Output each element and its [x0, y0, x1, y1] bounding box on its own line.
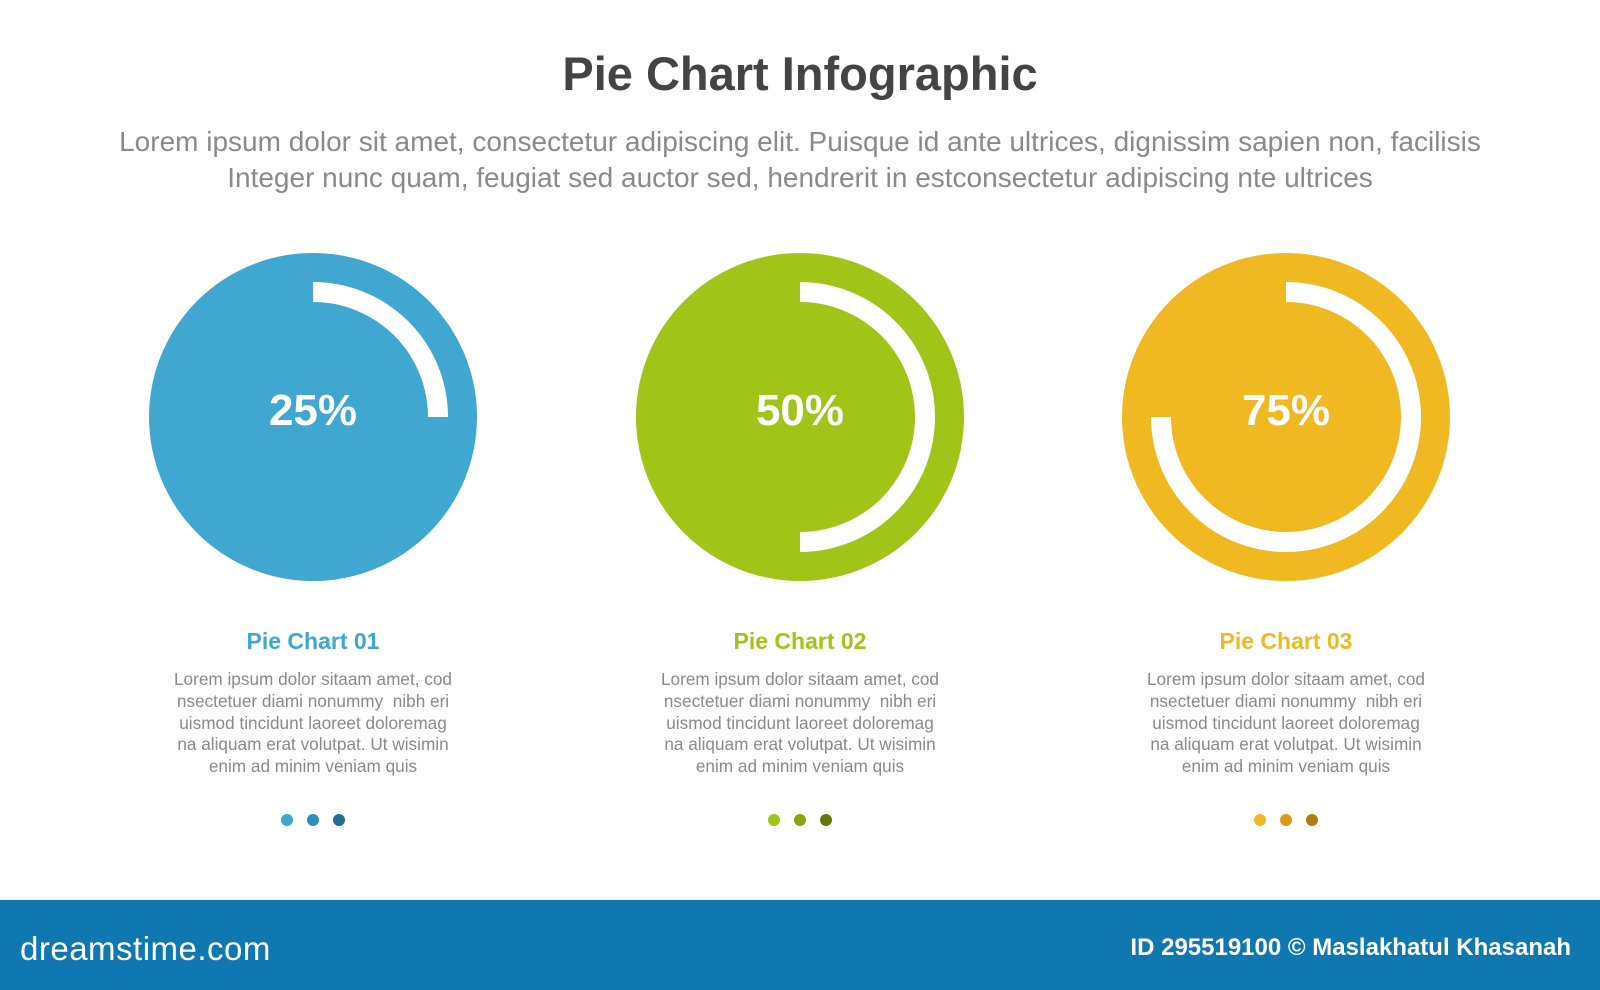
chart 2: 50%: 50% [756, 386, 844, 435]
text 2: enim ad minim veniam quis [696, 756, 904, 776]
text 1 [174, 669, 452, 776]
dots 1 [281, 814, 345, 826]
label 2: Pie Chart 02 [734, 628, 866, 654]
text 2: uismod tincidunt laoreet doloremag [666, 713, 934, 733]
label 3: Pie Chart 03 [1220, 628, 1352, 654]
text 1: uismod tincidunt laoreet doloremag [179, 713, 447, 733]
text 1: na aliquam erat volutpat. Ut wisimin [177, 734, 449, 754]
text 1: nsectetuer diami nonummy nibh eri [177, 691, 449, 711]
text 2: na aliquam erat volutpat. Ut wisimin [664, 734, 936, 754]
text 1: Lorem ipsum dolor sitaam amet, cod [174, 669, 452, 689]
text 2: nsectetuer diami nonummy nibh eri [664, 691, 936, 711]
title: Pie Chart Infographic [562, 47, 1038, 100]
text 3 [1147, 669, 1425, 776]
subtitle: Lorem ipsum dolor sit amet, consectetur adipiscing elit. Puisque id ante ultrices, dignissim sapien non, facilisis [119, 126, 1481, 157]
subtitle: Integer nunc quam, feugiat sed auctor sed, hendrerit in estconsectetur adipiscing nte ultrices [227, 162, 1373, 193]
text 2 [661, 669, 939, 776]
dots 3 [1254, 814, 1318, 826]
text 3: enim ad minim veniam quis [1182, 756, 1390, 776]
footer [0, 900, 1600, 990]
chart 1: 25% [149, 253, 477, 581]
text 2: Lorem ipsum dolor sitaam amet, cod [661, 669, 939, 689]
footer credit: ID 295519100 © Maslakhatul Khasanah [1130, 934, 1571, 961]
text 3: na aliquam erat volutpat. Ut wisimin [1150, 734, 1422, 754]
subtitle [119, 126, 1481, 193]
text 3: uismod tincidunt laoreet doloremag [1152, 713, 1420, 733]
chart 2: 50% [636, 253, 964, 581]
footer logo: dreamstime.com [20, 930, 271, 967]
text 1: enim ad minim veniam quis [209, 756, 417, 776]
dots 2 [768, 814, 832, 826]
chart 3: 75% [1122, 253, 1450, 581]
chart 3: 75%: 75% [1242, 386, 1330, 435]
label 1: Pie Chart 01 [247, 628, 379, 654]
text 3: Lorem ipsum dolor sitaam amet, cod [1147, 669, 1425, 689]
chart 1: 25%: 25% [269, 386, 357, 435]
text 3: nsectetuer diami nonummy nibh eri [1150, 691, 1422, 711]
